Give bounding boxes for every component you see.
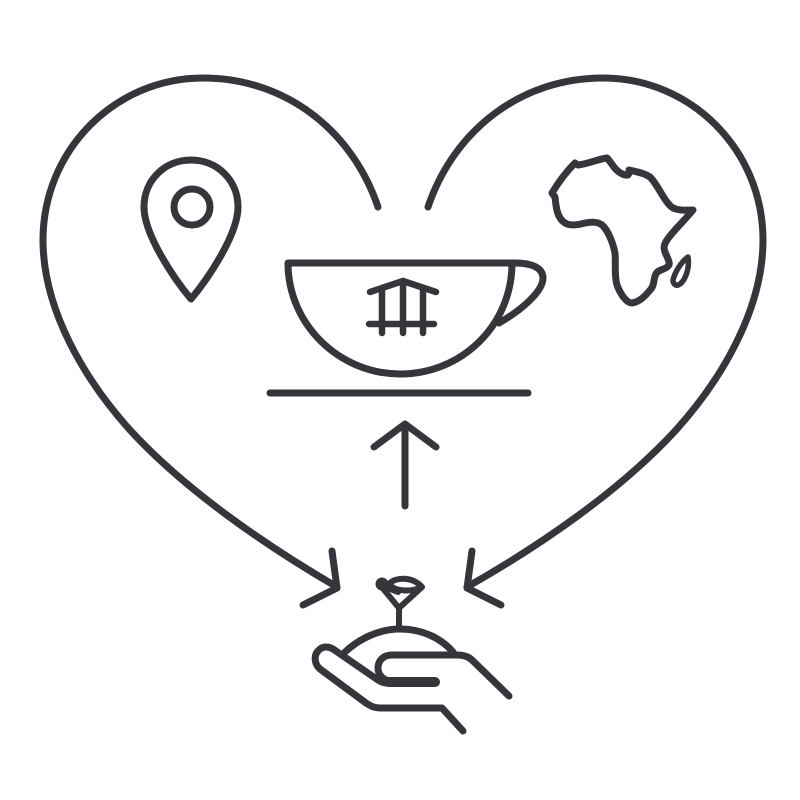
seedling sprout (378, 579, 422, 629)
arrow: up (374, 424, 436, 506)
arrow: heart right side (428, 78, 763, 605)
arrow: heart left side (43, 78, 378, 605)
icon: map of Africa (552, 158, 693, 303)
soil mound (345, 629, 453, 652)
cup bowl (288, 263, 515, 374)
icon: cup with building (288, 263, 543, 374)
saucer line (270, 390, 528, 396)
building (369, 281, 436, 333)
icon: location pin (144, 160, 238, 299)
thumb bar (388, 677, 435, 687)
icon: hand holding seedling (315, 579, 509, 731)
cup handle (499, 263, 543, 323)
hand (315, 647, 509, 731)
